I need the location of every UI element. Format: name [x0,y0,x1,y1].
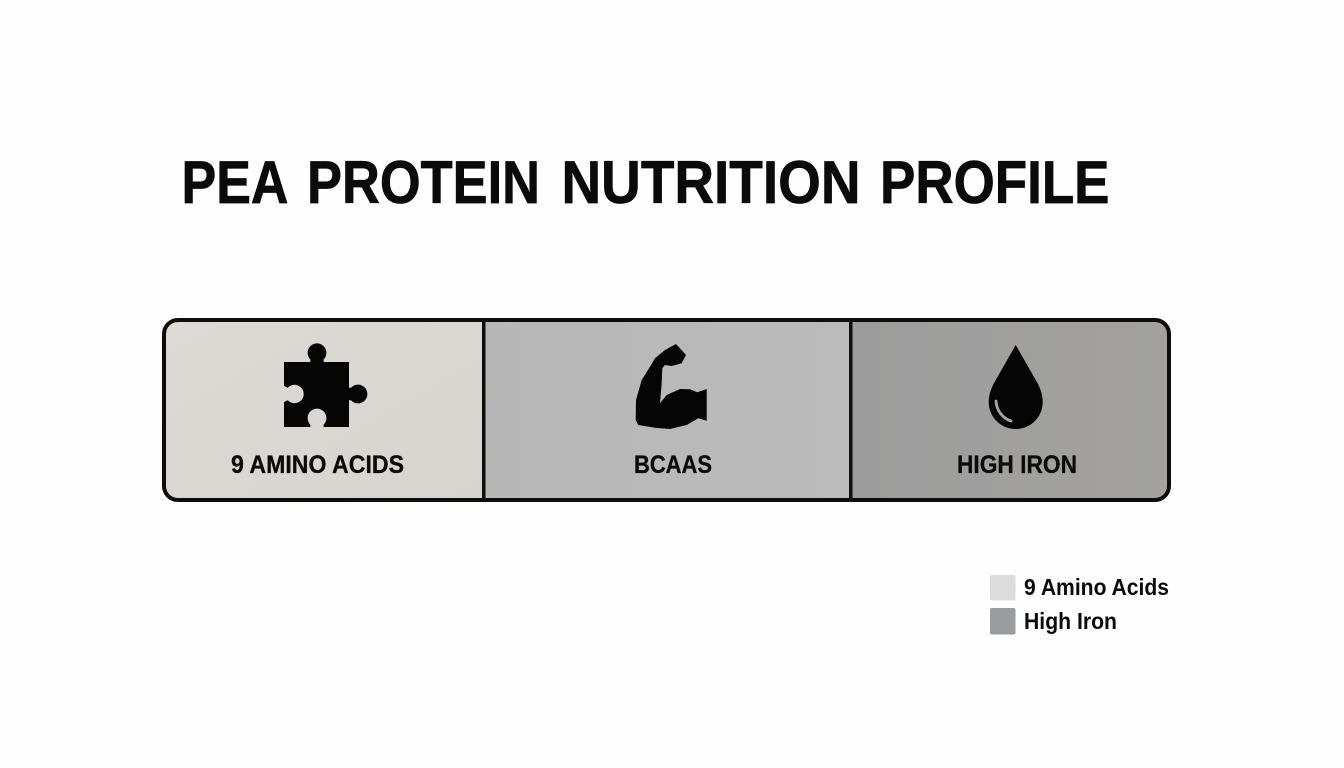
legend [990,574,1169,634]
panel: nutrition bar [164,320,1169,500]
icon: water drop [989,345,1043,429]
icon: flexed arm [636,344,707,429]
legend swatch: high iron [990,608,1016,634]
title: PEA [182,148,288,216]
panel: BCAAs [483,320,850,500]
label: BCAAs: BCAAS [634,451,712,479]
title [182,148,1110,216]
legend swatch: 9 amino acids [990,575,1016,600]
legend label: 9 amino acids: 9 Amino Acids [1024,574,1169,600]
legend label: high iron: High Iron [1024,608,1117,634]
panel: high iron [850,320,1169,500]
panel: 9 amino acids [164,320,483,500]
title: PROTEIN [307,148,540,216]
title: PROFILE [880,148,1110,216]
title: NUTRITION [562,148,860,216]
icon: puzzle piece [284,343,367,427]
label: high iron: HIGH IRON [957,451,1077,479]
label: 9 amino acids: 9 AMINO ACIDS [231,451,404,479]
